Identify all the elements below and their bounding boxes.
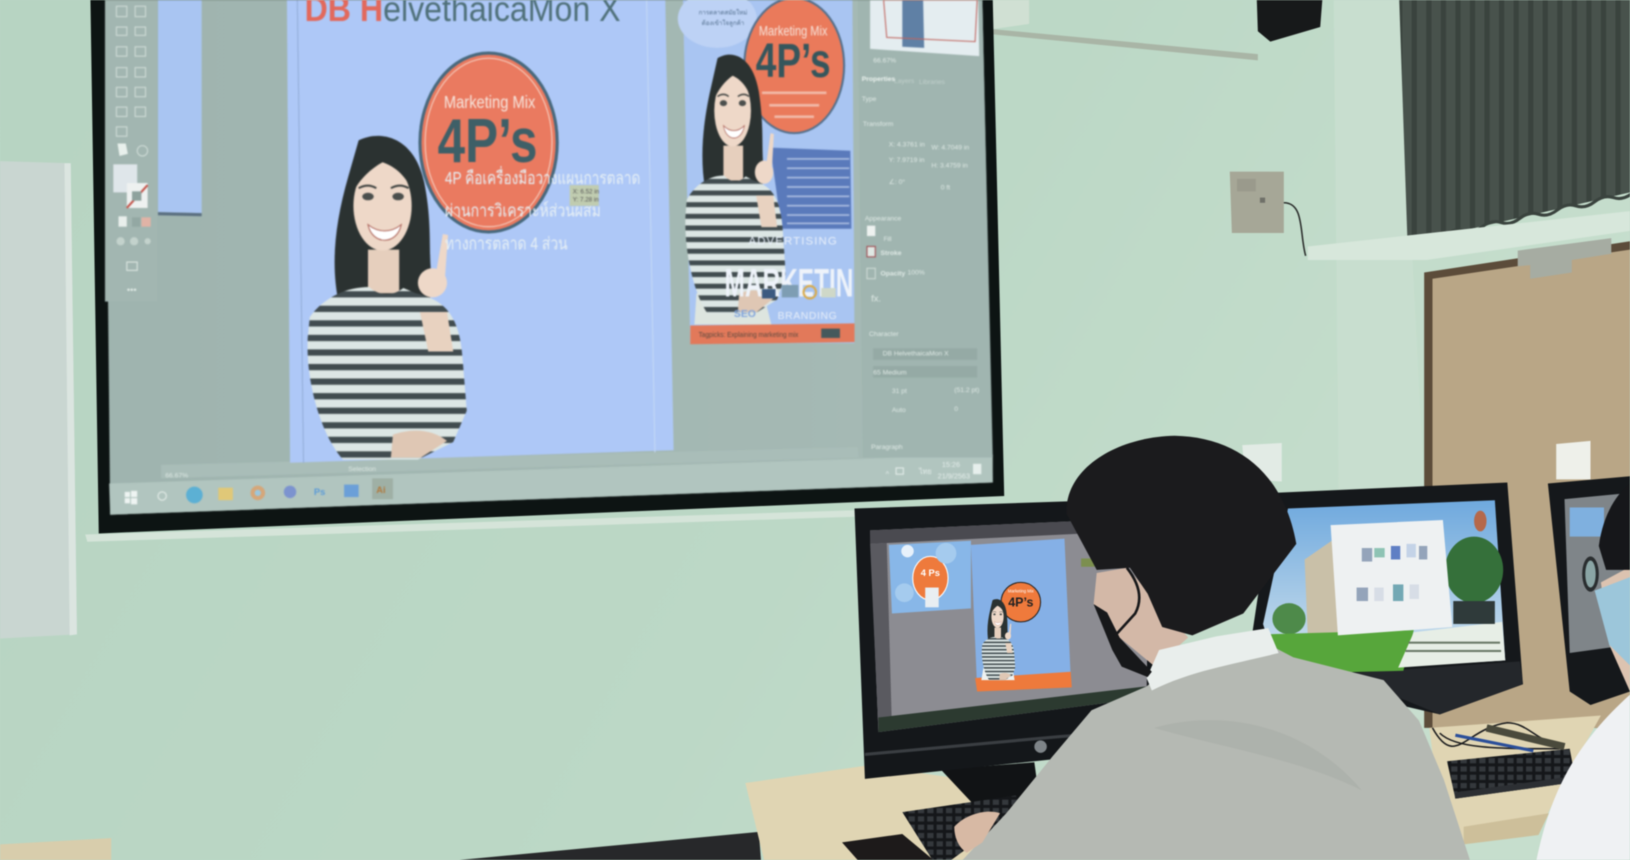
- main body text: 4P คือเครื่องมือวางแผนการตลาด: [445, 166, 640, 188]
- right properties panel: Type: [862, 96, 877, 103]
- poster words: ADVERTISING: [748, 235, 838, 247]
- desktop wallpaper: [1263, 500, 1505, 674]
- poster artboard: ต้องเข้าใจลูกค้า: [702, 19, 744, 27]
- monitor stand: [941, 762, 1040, 803]
- taskbar icons: [125, 478, 393, 504]
- taskbar icons: Ps: [314, 487, 325, 497]
- door: [1424, 238, 1630, 728]
- white caption area: [1398, 622, 1505, 668]
- trees: [1445, 537, 1503, 603]
- poster badge: Marketing Mix: [759, 23, 828, 38]
- right properties panel: H: 3.4759 in: [931, 162, 968, 169]
- right properties panel: 100%: [908, 270, 925, 277]
- curtain: [1399, 0, 1630, 243]
- poster artboard: [678, 0, 855, 344]
- building: [1305, 539, 1339, 636]
- right properties panel: Auto: [892, 407, 906, 414]
- speaker: [1257, 0, 1322, 42]
- taskbar: [109, 454, 993, 515]
- blue artboard: Marketing Mix: [1008, 589, 1035, 594]
- hand: [954, 812, 1000, 853]
- main woman: [308, 136, 467, 460]
- fill and stroke swatches: [113, 164, 148, 208]
- right properties panel: Appearance: [865, 215, 902, 222]
- poster artboard: MARKETIN: [725, 261, 853, 305]
- upper wall trim: [993, 0, 1258, 60]
- tray and clock: ไทย: [918, 467, 932, 476]
- right properties panel: X: 4.3761 in: [889, 142, 925, 149]
- mask: [1094, 604, 1152, 677]
- projection screen: [105, 0, 993, 515]
- selection tooltip: X: 6.52 in: [573, 188, 600, 195]
- right properties panel: Paragraph: [871, 444, 903, 451]
- students in wallpaper: [1453, 601, 1495, 624]
- poster badge: 4P’s: [756, 35, 831, 88]
- student right: [1536, 484, 1630, 860]
- poster artboard: BRANDING: [778, 311, 837, 322]
- hp logo: [1034, 740, 1047, 753]
- right properties panel: W: 4.7049 in: [931, 145, 969, 152]
- monitor front: [855, 501, 1154, 803]
- right properties panel: Stroke: [880, 250, 902, 257]
- right properties panel: Properties: [862, 76, 895, 83]
- selection tooltip: [570, 185, 600, 206]
- phone: [842, 834, 934, 860]
- poster badge: [744, 0, 844, 133]
- status labels: [165, 466, 376, 479]
- right properties panel: Y: 7.9719 in: [889, 157, 925, 164]
- window ledge: [1308, 211, 1630, 260]
- taskbar icons: Ai: [376, 485, 386, 495]
- man at computer: [954, 436, 1470, 860]
- whiteboard: [0, 161, 77, 639]
- blue artboard: [971, 539, 1072, 692]
- hair: [1067, 436, 1296, 635]
- navigator thumbnail: [870, 0, 979, 56]
- poster footer: [690, 323, 855, 344]
- file window: [1331, 520, 1452, 635]
- monitor right: [1548, 476, 1630, 705]
- tray and clock: 21/9/2563: [938, 471, 970, 480]
- status labels: Selection: [348, 466, 376, 473]
- tool strip: [870, 543, 892, 730]
- main body text: ผ่านการวิเคราะห์ส่วนผสม: [445, 200, 601, 220]
- blue artboard: 4P’s: [1008, 595, 1033, 609]
- right properties panel: [858, 0, 993, 458]
- small artboard: [158, 0, 202, 213]
- lawn: [1263, 630, 1414, 674]
- selection tooltip: Y: 7.28 in: [573, 197, 599, 204]
- right properties panel: Libraries: [919, 79, 945, 86]
- right properties panel: Character: [869, 331, 899, 338]
- right properties panel: 0 ft: [941, 184, 950, 191]
- poster artboard: SEO: [734, 309, 756, 320]
- right properties panel: 65 Medium: [873, 369, 907, 376]
- monitor back: [1247, 483, 1523, 714]
- main body text: [445, 166, 640, 254]
- app top bar: [870, 518, 1149, 544]
- tray and clock: [886, 460, 981, 480]
- poster skirt: [694, 293, 771, 324]
- main badge: Marketing Mix: [444, 92, 536, 112]
- status labels: 66.67%: [165, 472, 188, 479]
- left artboard: 4 Ps: [921, 568, 940, 578]
- status bar: [161, 447, 859, 478]
- tray and clock: ^: [886, 469, 890, 478]
- baseboard: [459, 832, 761, 860]
- poster artboard: Tagpicks: Explaining marketing mix: [699, 330, 799, 339]
- projector ledge: [85, 505, 1010, 542]
- main body text: ทางการตลาด 4 ส่วน: [445, 234, 568, 254]
- keyboard right: [1447, 749, 1576, 799]
- main badge: [420, 53, 557, 232]
- cables and pen: [1432, 723, 1565, 751]
- tools panel: [105, 0, 157, 302]
- right properties panel: (51.2 pt): [954, 387, 979, 394]
- color swatch: [1081, 558, 1095, 567]
- neck and face: [1094, 568, 1188, 667]
- right properties panel: ∠: 0°: [889, 178, 905, 186]
- windows taskbar: [878, 686, 1147, 732]
- projection screen frame: [90, 0, 1004, 533]
- tools panel: •••: [127, 285, 137, 295]
- desk: [745, 715, 1601, 860]
- sweater: [963, 647, 1470, 860]
- keyboard front: [902, 796, 1024, 860]
- collar: [1147, 628, 1279, 690]
- wall switch box: [1230, 172, 1306, 256]
- main badge: 4P’s: [438, 107, 537, 176]
- right properties panel: Transform: [863, 121, 894, 128]
- right properties panel: 66.67%: [873, 57, 896, 64]
- screen: [870, 518, 1149, 732]
- paper on door: [1556, 441, 1590, 479]
- paper on wall: [1242, 443, 1282, 481]
- poster small icons: [762, 285, 836, 298]
- tray and clock: 15:26: [942, 460, 960, 469]
- desk ledge left: [0, 838, 111, 860]
- poster artboard: การตลาดสมัยใหม่: [699, 9, 747, 17]
- left artboard: [889, 541, 971, 614]
- right properties panel: Fill: [884, 236, 892, 243]
- right properties panel: 31 pt: [892, 388, 907, 395]
- right properties panel: Layers: [894, 78, 915, 85]
- right properties panel: 0: [954, 406, 958, 413]
- right properties panel: Opacity: [880, 271, 905, 278]
- right properties panel: fx.: [871, 294, 881, 304]
- crest: [1474, 511, 1487, 531]
- poster woman: [685, 55, 786, 314]
- poster dark text box: [770, 148, 851, 229]
- main artboard: [287, 0, 674, 463]
- door closer: [1518, 238, 1611, 279]
- right properties panel: DB HelvethaicaMon X: [883, 351, 949, 358]
- pillar: [1334, 0, 1424, 718]
